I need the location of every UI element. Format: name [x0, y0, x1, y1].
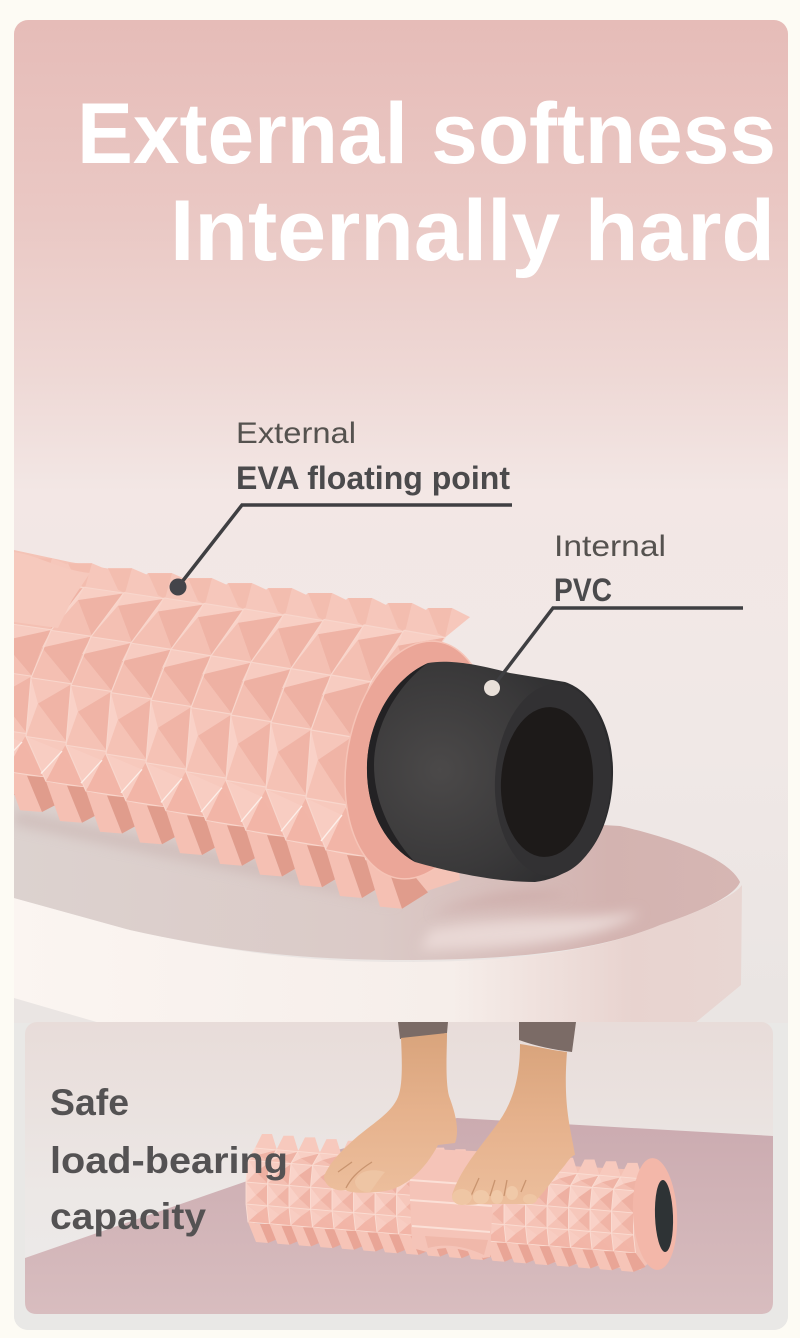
- callout: external EVA: EVA floating point: [236, 460, 510, 496]
- inset text: [50, 1082, 288, 1237]
- title: External softness: [77, 86, 776, 182]
- inset text: capacity: [50, 1196, 206, 1237]
- inset background: [25, 1022, 773, 1314]
- callout: internal PVC: [484, 530, 743, 696]
- title: [77, 86, 776, 279]
- feet: [324, 1022, 576, 1205]
- title: Internally hard: [170, 183, 775, 279]
- inner PVC tube: [367, 662, 616, 882]
- lower panel base: [14, 1023, 788, 1330]
- callout: internal PVC: PVC: [554, 572, 612, 608]
- inset text: Safe: [50, 1082, 129, 1123]
- foam roller, EVA outer layer: [0, 550, 509, 909]
- callout: external EVA: External: [236, 417, 356, 450]
- callout: internal PVC: Internal: [554, 530, 666, 563]
- inset text: load-bearing: [50, 1140, 288, 1181]
- small foam roller: [246, 1134, 680, 1272]
- inset panel: load bearing: [25, 1022, 773, 1314]
- display platform: [14, 790, 742, 1023]
- callout: external EVA: [170, 417, 512, 596]
